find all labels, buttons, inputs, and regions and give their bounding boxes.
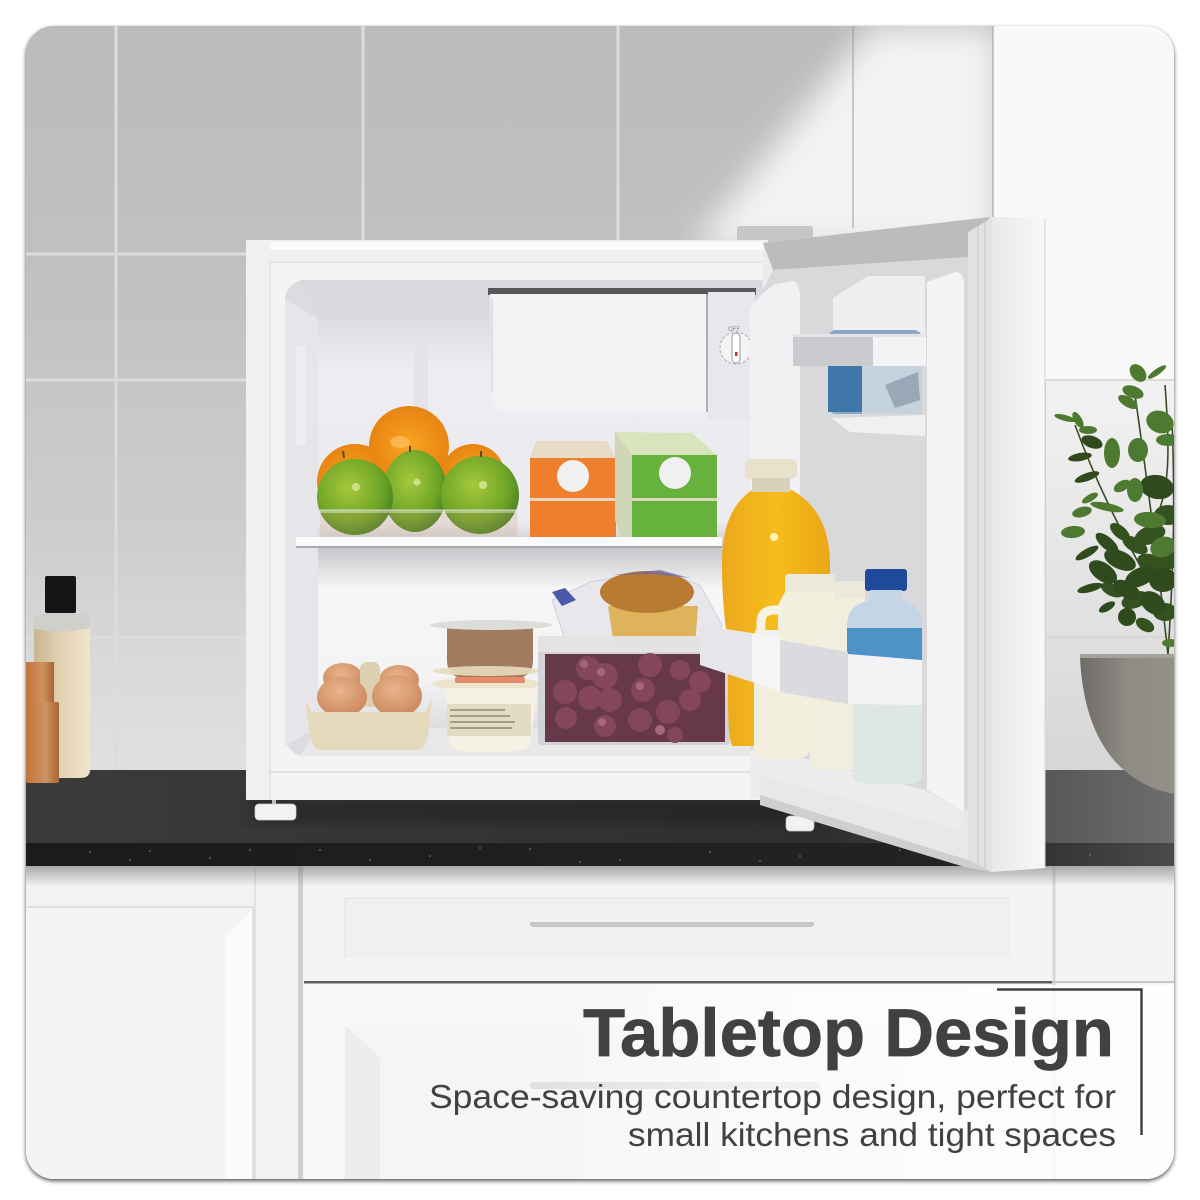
door liner columns — [750, 272, 964, 830]
interior — [285, 280, 765, 756]
door seal and outer edge — [968, 218, 1045, 872]
dense lower foliage — [1101, 505, 1174, 632]
thermostat panel — [708, 292, 755, 364]
plant — [1054, 361, 1182, 794]
description — [429, 1078, 1116, 1153]
cabinet body — [246, 240, 768, 800]
plant bowl — [1080, 654, 1174, 794]
wire shelf — [296, 537, 722, 548]
pump bottle — [34, 576, 90, 778]
orange juice bottle — [722, 459, 830, 746]
freezer compartment — [488, 288, 756, 420]
chocolate pudding — [430, 620, 552, 678]
egg carton — [305, 662, 432, 750]
orange carton — [530, 441, 616, 537]
left cabinet door — [26, 868, 256, 1179]
oranges — [317, 406, 502, 490]
fridge feet — [255, 798, 814, 831]
grape box — [538, 636, 730, 745]
rear hinge — [737, 226, 813, 242]
title: Tabletop Design — [583, 995, 1114, 1071]
wooden container — [26, 662, 59, 783]
yogurt pot — [432, 666, 542, 752]
countertop — [26, 770, 1174, 867]
description: small kitchens and tight spaces — [628, 1116, 1116, 1153]
first milk bottle — [754, 574, 835, 758]
counter bottles — [26, 576, 90, 783]
green carton — [615, 432, 717, 537]
white cabinets — [26, 866, 1174, 1179]
apples — [317, 446, 519, 535]
bread bag and muffin — [552, 570, 722, 636]
lower drawer — [530, 1082, 1174, 1179]
upper door bottle — [828, 330, 922, 414]
water bottle — [847, 569, 922, 784]
upper door rack — [793, 334, 926, 366]
milk bottles — [754, 574, 865, 770]
caption bracket — [997, 990, 1142, 1135]
fridge — [246, 217, 1045, 872]
tiled wall — [26, 26, 1174, 770]
open door — [750, 217, 1045, 872]
second milk bottle — [810, 581, 865, 770]
right cabinet — [1052, 866, 1174, 985]
thermostat panel: OFF — [728, 327, 740, 333]
description: Space-saving countertop design, perfect for — [429, 1078, 1116, 1115]
clear tray — [320, 510, 517, 538]
drawer with handle — [344, 898, 1010, 958]
door bottle rack — [700, 625, 922, 705]
